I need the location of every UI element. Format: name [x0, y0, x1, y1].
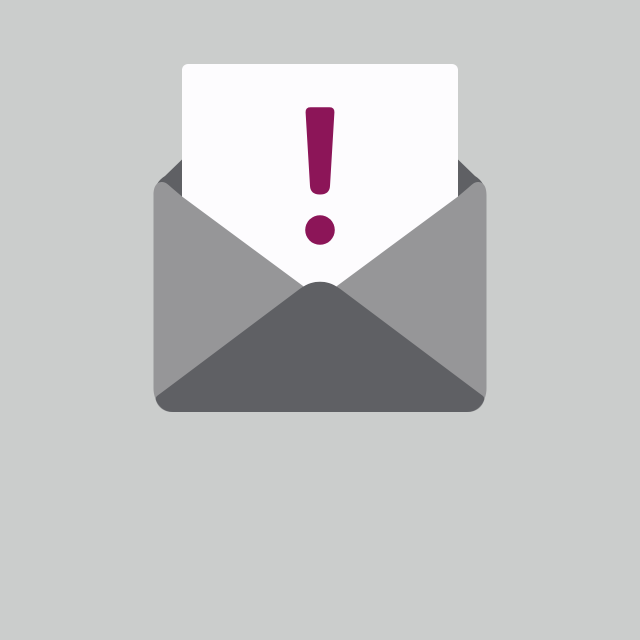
- envelope front flap: [156, 282, 484, 412]
- icon: exclamation mark: [305, 107, 335, 245]
- envelope left side panel: [154, 182, 322, 412]
- icon: envelope back flap: [157, 160, 483, 300]
- letter sheet: [182, 64, 458, 364]
- envelope right side panel: [318, 182, 486, 412]
